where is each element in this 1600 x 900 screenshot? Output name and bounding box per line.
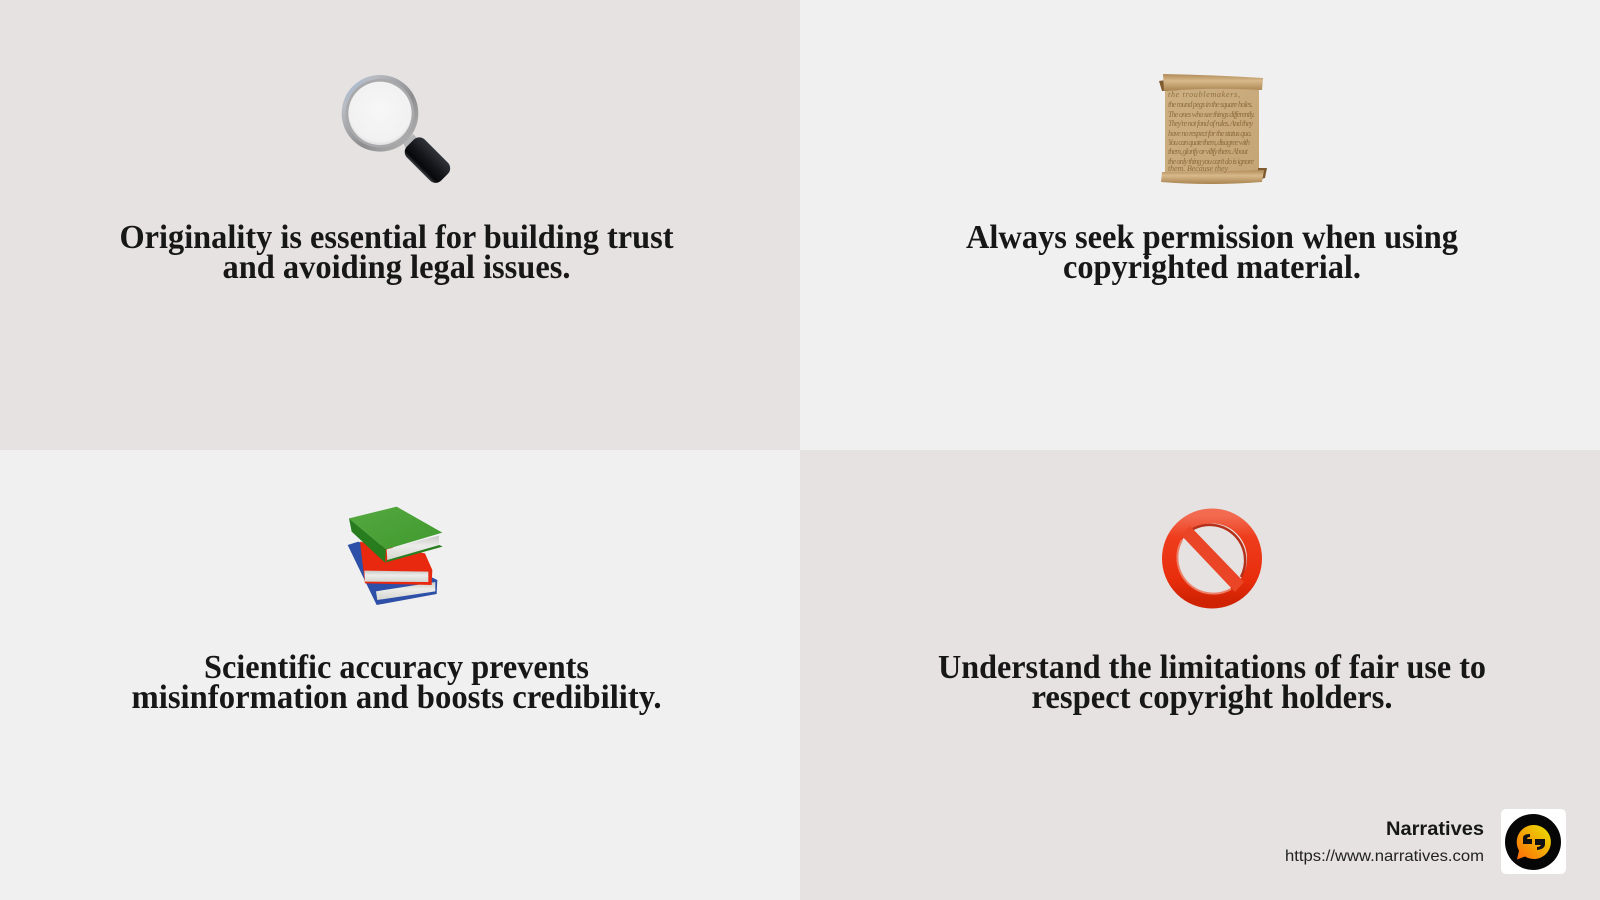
icon: scroll: have no respect for the status quo. (1168, 129, 1252, 138)
heading: accuracy: misinformation and boosts credibility. (132, 679, 662, 716)
icon: scroll: They're not fond of rules. And they (1168, 119, 1253, 128)
icon: scroll: the only thing you can't do is ignore (1168, 157, 1254, 166)
icon: scroll: You can quote them, disagree with (1168, 138, 1250, 147)
icon: scroll: the troublemakers, (1168, 90, 1240, 99)
icon: scroll: them. Because they (1168, 164, 1228, 173)
logo (1501, 809, 1566, 874)
icon: scroll: The ones who see things differently. (1168, 110, 1255, 119)
heading: fair use: respect copyright holders. (1032, 679, 1392, 716)
panel: fair use (800, 450, 1600, 900)
heading: fair use (938, 649, 1486, 716)
icon: scroll: them, glorify or vilify them. About (1168, 147, 1249, 156)
panel: accuracy (0, 450, 800, 900)
brand url: https://www.narratives.com (1285, 848, 1484, 865)
heading: originality: and avoiding legal issues. (222, 249, 570, 286)
heading: originality: Originality is essential for building trust (120, 219, 674, 256)
heading: fair use: Understand the limitations of fair use to (938, 649, 1486, 686)
icon: scroll (1159, 74, 1267, 184)
icon: prohibited sign (1170, 516, 1254, 601)
brand block (1285, 809, 1566, 874)
icon: magnifying glass (342, 75, 453, 186)
heading: permission: Always seek permission when using (966, 219, 1458, 256)
icon: books (348, 507, 443, 605)
brand name: Narratives (1386, 819, 1484, 840)
heading: originality (120, 219, 674, 286)
icon: scroll: the round pegs in the square holes. (1168, 100, 1253, 109)
heading: accuracy: Scientific accuracy prevents (204, 649, 589, 686)
panel: permission (800, 0, 1600, 450)
panel: originality (0, 0, 800, 450)
heading: permission (966, 219, 1458, 286)
heading: permission: copyrighted material. (1063, 249, 1361, 286)
heading: accuracy (132, 649, 662, 716)
